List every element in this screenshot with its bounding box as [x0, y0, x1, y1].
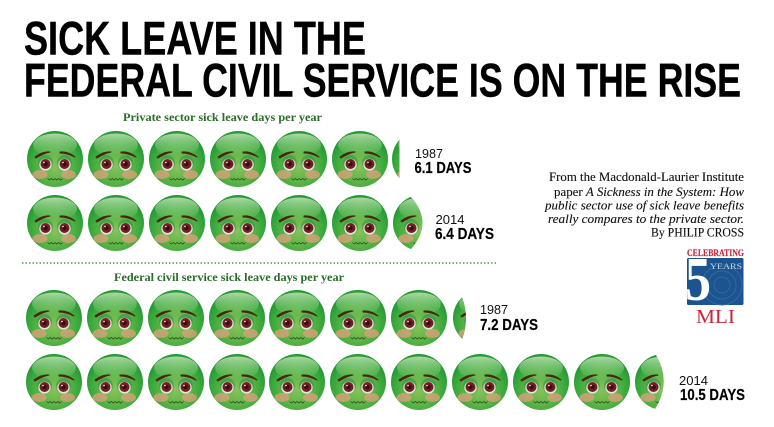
row: federal 1987 faces [26, 290, 509, 346]
source text block [544, 170, 745, 240]
label: federal 1987: 7.2 DAYS [480, 317, 538, 334]
title [24, 12, 741, 107]
row: federal 2014 faces [26, 354, 691, 410]
source text block: paper A Sickness in the System: How [554, 185, 745, 199]
label: private 2014 [435, 212, 494, 243]
label: federal 2014: 2014 [679, 373, 708, 388]
label: federal 2014 [679, 373, 745, 404]
label: federal 2014: 10.5 DAYS [680, 387, 745, 404]
heading: federal civil service: Federal civil service sick leave days per year [114, 270, 345, 284]
logo: MLI 5 years: CELEBRATING [687, 249, 744, 259]
logo: MLI 5 years [685, 246, 744, 328]
label: private 1987: 1987 [415, 146, 443, 161]
logo: MLI 5 years: YEARS [710, 261, 742, 271]
label: federal 1987 [480, 302, 538, 334]
heading: private sector: Private sector sick leave days per year [123, 110, 323, 124]
source text block: From the Macdonald-Laurier Institute [549, 170, 745, 184]
source text block: public sector use of sick leave benefits [544, 198, 744, 212]
source text block: By PHILIP CROSS [651, 226, 744, 240]
label: private 2014: 6.4 DAYS [435, 226, 494, 243]
row: private sector 2014 faces [27, 195, 449, 251]
label: federal 1987: 1987 [480, 302, 508, 317]
source text block: really compares to the private sector. [548, 212, 744, 226]
label: private 2014: 2014 [436, 212, 464, 227]
title: SICK LEAVE IN THE [24, 12, 366, 65]
row: private sector 1987 faces [27, 131, 400, 187]
logo: MLI 5 years: MLI [696, 306, 735, 328]
label: private 1987: 6.1 DAYS [414, 160, 472, 177]
label: private 1987 [414, 146, 472, 177]
logo: MLI 5 years: 5 [685, 246, 711, 314]
